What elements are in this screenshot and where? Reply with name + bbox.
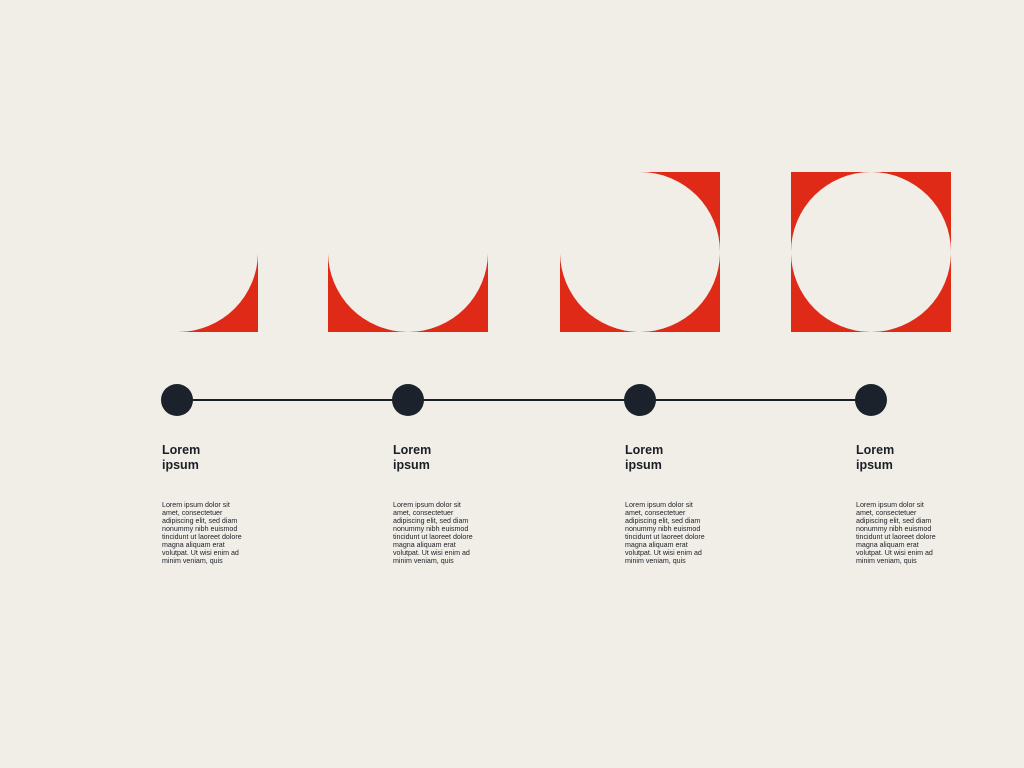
text 1: magna aliquam erat: [162, 541, 225, 549]
text 2: Lorem ipsum dolor sit: [393, 501, 461, 509]
text 3: [625, 501, 705, 565]
shape 4: full: [791, 172, 951, 332]
text 3: volutpat. Ut wisi enim ad: [625, 549, 702, 557]
text 4: Lorem ipsum dolor sit: [856, 501, 924, 509]
text 4: amet, consectetuer: [856, 509, 916, 517]
heading 4: ipsum: [856, 458, 893, 472]
text 3: nonummy nibh euismod: [625, 525, 700, 533]
text 1: Lorem ipsum dolor sit: [162, 501, 230, 509]
heading 1: ipsum: [162, 458, 199, 472]
shape 3: three quarters: [560, 172, 720, 332]
text 1: tincidunt ut laoreet dolore: [162, 533, 242, 541]
heading 2: ipsum: [393, 458, 430, 472]
text 1: minim veniam, quis: [162, 557, 223, 565]
heading 3: [625, 443, 663, 472]
text 1: adipiscing elit, sed diam: [162, 517, 237, 525]
text 4: minim veniam, quis: [856, 557, 917, 565]
text 2: nonummy nibh euismod: [393, 525, 468, 533]
text 2: tincidunt ut laoreet dolore: [393, 533, 473, 541]
text 2: volutpat. Ut wisi enim ad: [393, 549, 470, 557]
heading 3: ipsum: [625, 458, 662, 472]
text 3: adipiscing elit, sed diam: [625, 517, 700, 525]
text 4: volutpat. Ut wisi enim ad: [856, 549, 933, 557]
text 4: [856, 501, 936, 565]
timeline: [161, 384, 887, 416]
text 4: tincidunt ut laoreet dolore: [856, 533, 936, 541]
text 1: amet, consectetuer: [162, 509, 222, 517]
text 4: nonummy nibh euismod: [856, 525, 931, 533]
text 3: amet, consectetuer: [625, 509, 685, 517]
text 2: minim veniam, quis: [393, 557, 454, 565]
text 3: magna aliquam erat: [625, 541, 688, 549]
text 1: nonummy nibh euismod: [162, 525, 237, 533]
text 2: amet, consectetuer: [393, 509, 453, 517]
text 3: tincidunt ut laoreet dolore: [625, 533, 705, 541]
heading 4: [856, 443, 894, 472]
heading 1: Lorem: [162, 443, 200, 457]
heading 4: Lorem: [856, 443, 894, 457]
heading 1: [162, 443, 200, 472]
text 4: magna aliquam erat: [856, 541, 919, 549]
text 3: Lorem ipsum dolor sit: [625, 501, 693, 509]
text 1: [162, 501, 242, 565]
shape 2: half: [328, 252, 488, 332]
heading 2: Lorem: [393, 443, 431, 457]
text 2: [393, 501, 473, 565]
shape 1: quarter: [178, 252, 258, 332]
text 3: minim veniam, quis: [625, 557, 686, 565]
heading 2: [393, 443, 431, 472]
text 2: magna aliquam erat: [393, 541, 456, 549]
text 4: adipiscing elit, sed diam: [856, 517, 931, 525]
text 1: volutpat. Ut wisi enim ad: [162, 549, 239, 557]
heading 3: Lorem: [625, 443, 663, 457]
text 2: adipiscing elit, sed diam: [393, 517, 468, 525]
